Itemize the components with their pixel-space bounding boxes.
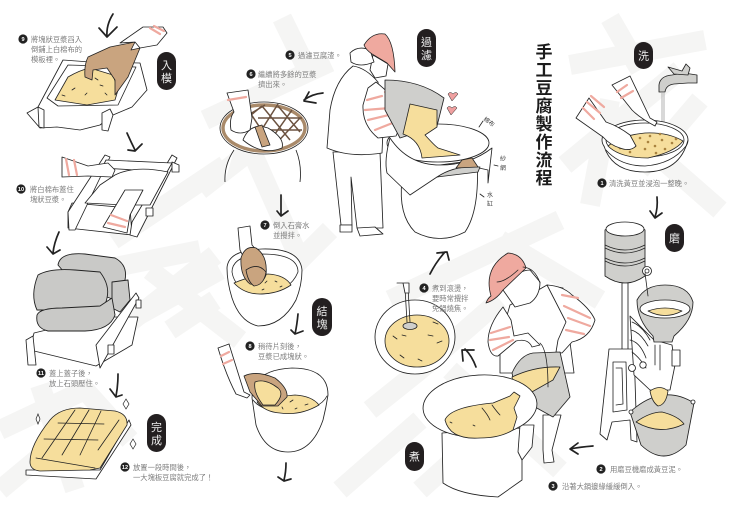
arrow 2 to 3 — [570, 443, 593, 454]
panel: step 3 boil — [405, 253, 642, 497]
step 5 caption: 過濾豆腐渣。 — [298, 51, 342, 60]
step 12 caption: 12 — [122, 465, 128, 471]
cloth bundle — [85, 169, 168, 205]
bowl — [252, 368, 328, 452]
title: 流 — [536, 150, 552, 170]
pill label: mold: 入 — [161, 60, 172, 72]
tofu block — [30, 408, 127, 471]
panel: step 5 filter — [285, 29, 506, 238]
filter cloth over jar — [386, 124, 492, 195]
jar below basket — [225, 150, 300, 182]
panel: step 8 curds — [218, 341, 328, 452]
handwritten notes — [479, 115, 506, 208]
icon: hearts — [447, 92, 458, 115]
step 12 caption — [120, 462, 213, 482]
pill label: mold: 模 — [161, 72, 172, 85]
step 1 caption: 清洗黃豆並浸泡一整晚。 — [609, 179, 689, 188]
step 11 caption — [36, 368, 100, 388]
bamboo basket — [220, 102, 308, 154]
person filtering — [327, 34, 407, 236]
pill label: mold — [157, 52, 176, 90]
step 6 caption: 繼續將多餘的豆漿 — [258, 70, 316, 79]
step 9 caption: 9 — [21, 37, 25, 43]
arm with scoop — [218, 344, 287, 406]
step 3 caption: 沿著大鍋邊緣緩緩倒入。 — [562, 482, 642, 491]
step 10 caption: 將白棉布蓋住 — [30, 185, 74, 194]
plate with soybean milk — [375, 283, 455, 374]
arrow 4 to 5 — [430, 252, 449, 274]
pill label: boil — [405, 442, 424, 471]
panel: step 2 grinder — [596, 222, 695, 474]
pill label: grind: 磨 — [669, 231, 680, 245]
soy paste in mold — [55, 68, 118, 105]
icon: faucet — [659, 64, 697, 130]
tilted bucket — [385, 80, 444, 138]
step 9 caption: 將塊狀豆漿舀入 — [31, 35, 83, 44]
arm bottom — [103, 190, 143, 233]
mold with cloth — [27, 60, 147, 131]
step 9 caption — [18, 34, 83, 64]
step 4 caption: 要時常攪拌 — [432, 294, 469, 303]
step 5 caption: 5 — [288, 53, 292, 59]
title: 工 — [536, 61, 552, 80]
title: 腐 — [536, 96, 552, 116]
step 10 caption: 塊狀豆漿。 — [30, 195, 66, 204]
water jar — [401, 160, 478, 238]
arrow 1 to 2 — [650, 197, 662, 218]
arrow 9 to 10 — [127, 133, 142, 151]
bowl of soybeans — [602, 120, 688, 172]
panel: step 10 cover — [16, 155, 179, 237]
step 7 caption: 7 — [263, 223, 267, 229]
pill label: done: 成 — [151, 434, 162, 447]
pill label: curdle: 塊 — [316, 317, 328, 331]
handwritten notes: 水 — [487, 191, 493, 199]
step 4 caption: 免鍋燒焦。 — [432, 304, 468, 313]
panel: step 4 stir — [375, 283, 469, 374]
step 12 caption: 一大塊板豆腐就完成了！ — [133, 473, 213, 482]
step 11 caption: 放上石頭壓住。 — [49, 379, 100, 388]
step 6 caption — [246, 69, 316, 89]
arrow 10 to 11 — [47, 232, 60, 254]
bowl — [227, 249, 302, 326]
title: 豆 — [536, 79, 552, 98]
arm left — [62, 157, 115, 177]
person pouring — [486, 253, 595, 463]
step 8 caption — [245, 341, 309, 361]
title: 手 — [536, 42, 552, 62]
pill label: boil: 煮 — [409, 450, 420, 464]
panel: step 6 squeeze — [220, 69, 316, 182]
panel: step 7 gypsum — [227, 220, 310, 326]
arrow 8 to 9 — [278, 463, 291, 481]
arrow into 9 — [99, 14, 117, 37]
pill label: done — [147, 414, 166, 452]
pill label: curdle — [312, 298, 332, 336]
step 6 caption: 6 — [249, 72, 253, 78]
title: 作 — [536, 133, 552, 152]
arrow 7 to 8 — [291, 314, 303, 334]
icon: sparkles — [36, 399, 136, 449]
step 2 caption: 2 — [599, 467, 603, 473]
step 7 caption: 並攪拌。 — [273, 231, 302, 240]
step 9 caption: 倒鋪上白棉布的 — [31, 45, 82, 54]
wooden frame — [68, 155, 179, 237]
step 4 caption: 4 — [422, 286, 426, 292]
hand with ladle — [238, 226, 266, 286]
arms washing — [576, 76, 657, 150]
step 11 caption: 蓋上蓋子後， — [49, 369, 93, 378]
title: 製 — [536, 115, 552, 134]
step 8 caption: 稍待片刻後， — [258, 342, 302, 351]
pouring bucket — [512, 343, 570, 417]
arrow 3 to 4 — [462, 349, 476, 367]
big wok — [421, 372, 539, 440]
arm squeezing — [227, 90, 270, 147]
step 11 caption: 11 — [38, 371, 44, 377]
grinder stand — [600, 283, 680, 442]
arrow 5 to 6 — [304, 92, 323, 103]
step 3 caption: 3 — [551, 484, 555, 490]
title: 程 — [536, 169, 552, 188]
scoop and hand — [62, 26, 167, 96]
stove — [442, 428, 522, 497]
arrow 11 to 12 — [110, 374, 122, 397]
pill label: curdle: 結 — [316, 304, 328, 318]
step 6 caption: 擠出來。 — [258, 80, 287, 89]
step 4 caption — [419, 283, 469, 313]
tofu board — [26, 420, 131, 479]
grinder funnel — [637, 273, 693, 342]
arrow 6 to 7 — [277, 195, 288, 216]
step 10 caption — [16, 184, 74, 204]
step 4 caption: 煮到滾燙， — [432, 284, 468, 293]
bucket with soybean paste — [629, 388, 695, 456]
water tank — [605, 222, 652, 283]
handwritten notes: 缸 — [487, 200, 493, 208]
panel: step 9 mold — [18, 14, 176, 131]
step 12 caption: 放置一段時間後， — [133, 463, 191, 472]
handwritten notes: 棉布 — [482, 115, 496, 129]
pill label: filter: 過 — [421, 35, 432, 49]
step 8 caption: 豆漿已成塊狀。 — [258, 352, 309, 361]
step 1 caption: 1 — [600, 181, 604, 187]
pill label: wash — [634, 42, 653, 69]
step 8 caption: 8 — [248, 344, 252, 350]
step 7 caption: 倒入石膏水 — [273, 221, 310, 230]
handwritten notes: 紗 — [500, 156, 506, 163]
pill label: grind — [665, 224, 684, 252]
tied cloth blocks — [34, 254, 130, 331]
panel: step 12 done — [26, 399, 213, 482]
step 9 caption: 模板裡。 — [31, 55, 60, 64]
panel: step 11 press — [26, 254, 141, 388]
pill label: wash: 洗 — [638, 50, 649, 62]
step 2 caption: 用磨豆機磨成黃豆泥。 — [610, 465, 683, 474]
panel: step 1 wash — [576, 42, 697, 188]
step 7 caption — [260, 220, 310, 240]
handwritten notes: 網 — [500, 164, 506, 172]
step 10 caption: 10 — [18, 187, 24, 193]
wooden press — [26, 293, 141, 368]
pill label: done: 完 — [151, 420, 162, 434]
pill label: filter: 濾 — [421, 48, 432, 62]
pill label: filter — [417, 29, 436, 67]
pouring soy paste — [403, 104, 460, 158]
